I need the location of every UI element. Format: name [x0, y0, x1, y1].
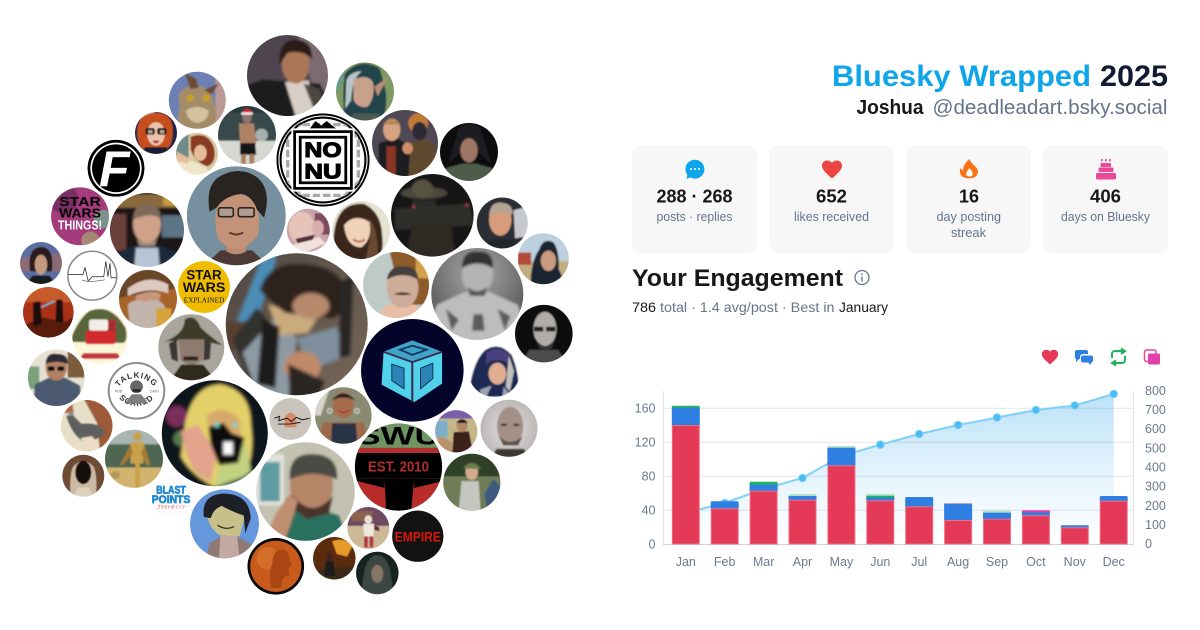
- avatar: golden droid in desert: [105, 430, 163, 488]
- month labels: Feb: [714, 555, 736, 569]
- user name and handle: @deadleadart.bsky.social: [932, 97, 1168, 119]
- month labels: Jun: [870, 555, 890, 569]
- right axis labels: 300: [1145, 480, 1166, 494]
- avatar: Talking Scared podcast logo: [108, 362, 166, 420]
- month labels: Nov: [1064, 555, 1087, 569]
- avatar: feathered creature: [168, 72, 226, 129]
- icon: birthday cake: [1096, 159, 1116, 180]
- avatar: glowing blue holocron cube: [361, 319, 464, 422]
- card: day posting streak: [906, 145, 1031, 253]
- stat label: days on Bluesky: [1061, 210, 1151, 224]
- avatar: NONO geometric logo: NO: [304, 138, 342, 162]
- avatar: man with sunglasses: [28, 349, 85, 406]
- stacked bars: [672, 406, 1128, 544]
- avatar: SWU logo with red helmet: [346, 415, 451, 522]
- avatar: Star Wars Explained logo: STAR: [186, 267, 222, 283]
- avatar: bearded wizard with mug: [119, 270, 177, 328]
- left axis labels: 80: [642, 470, 656, 484]
- right axis labels: [1145, 384, 1166, 551]
- stat label: day posting: [936, 210, 1001, 224]
- avatar: bald man with glasses in black and white: [515, 304, 573, 362]
- avatar: Star Wars Things logo: STAR: [59, 194, 101, 209]
- avatar: copper penny: [247, 538, 304, 595]
- stat label: likes received: [794, 210, 869, 224]
- avatar: Star Wars Things logo: WARS: [59, 205, 101, 220]
- avatar: Star Wars Explained logo: [178, 261, 230, 313]
- right axis labels: 600: [1145, 422, 1166, 436]
- avatar: cartoon man with glasses: [187, 166, 286, 275]
- month labels: Dec: [1103, 555, 1125, 569]
- avatar: hooded dark figure: [352, 547, 403, 599]
- icon: heart: [822, 160, 842, 178]
- avatar: man in bar with mustache: [363, 252, 429, 318]
- avatar: man at colorful fair: [431, 406, 482, 457]
- month labels: Apr: [793, 555, 812, 569]
- avatar: red lava battle scene: [23, 287, 74, 338]
- icon: speech bubble: [685, 160, 704, 179]
- avatar: hooded figure in desert: [518, 233, 569, 284]
- engagement summary line: January: [839, 299, 888, 315]
- avatar: large mirror selfie in denim jacket: [226, 253, 368, 396]
- avatar: Talking Scared podcast logo: TALKING: [114, 372, 157, 386]
- left axis labels: 160: [635, 402, 656, 416]
- avatar: Star Wars Things logo: [51, 187, 109, 246]
- title: Bluesky Wrapped 2025: 2025: [1100, 60, 1168, 93]
- avatar: red jeep on cream background: [72, 308, 128, 364]
- avatar: SWU logo with red helmet: EST. 2010: [368, 459, 429, 475]
- avatar: Blast Points logo: POINTS: [152, 494, 190, 506]
- right axis labels: 700: [1145, 403, 1166, 417]
- avatar: man in dark jacket: [247, 35, 328, 116]
- avatar: Star Wars Explained logo: WARS: [183, 279, 225, 295]
- avatar: witch painting: [158, 314, 224, 380]
- engagement summary line: 786: [632, 299, 656, 315]
- avatar: smiling woman with brown hair: [332, 201, 390, 259]
- avatar: woman in blue and white headdress: [470, 346, 519, 397]
- cumulative area and line: [686, 390, 1117, 544]
- legend icons: [1042, 348, 1160, 366]
- panel: stat cards: [632, 145, 1168, 253]
- right axis labels: 200: [1145, 499, 1166, 513]
- right axis labels: 100: [1145, 518, 1166, 532]
- avatar: Blast Points logo: BLAST: [156, 484, 186, 496]
- right axis labels: 500: [1145, 442, 1166, 456]
- avatar: illustrated hen: [60, 400, 112, 452]
- card: likes received: [769, 145, 894, 253]
- icon: reposts arrows: [1112, 348, 1125, 366]
- avatar: Talking Scared podcast logo: POD: [115, 390, 123, 394]
- right axis labels: 800: [1145, 384, 1166, 398]
- right axis labels: 400: [1145, 460, 1166, 474]
- stat label second line: streak: [951, 226, 987, 240]
- left axis labels: 0: [649, 538, 656, 552]
- month labels: Jan: [676, 555, 696, 569]
- icon: replies bubbles: [1075, 350, 1093, 365]
- avatar: NONO geometric logo: NU: [304, 160, 342, 184]
- card: posts and replies: [632, 145, 757, 253]
- icon: flame: [960, 159, 978, 178]
- avatar: black and white tattooed man: [431, 248, 524, 340]
- month labels: Mar: [753, 555, 774, 569]
- avatar: monkey with dark mask: [62, 454, 104, 497]
- avatar: boy in cap outdoors: [437, 448, 506, 517]
- user name and handle: Joshua: [856, 97, 924, 119]
- avatar: Empire red logo: EMPIRE: [395, 528, 441, 544]
- avatar: signature with orange arch: [270, 398, 312, 440]
- icon: likes heart: [1042, 350, 1058, 364]
- avatar: SWU logo with red helmet: SWU: [357, 422, 440, 450]
- left axis labels: 40: [642, 504, 656, 518]
- avatar: blurred close-up: [286, 208, 330, 252]
- avatar: shirtless man with santa hat: [218, 106, 276, 164]
- avatar: Talking Scared podcast logo: SCARED: [120, 394, 152, 406]
- avatar: red hair with black glasses: [135, 112, 177, 154]
- avatar: blonde woman with torn monster face: [162, 380, 268, 486]
- avatar: F logo: [88, 140, 144, 197]
- panel: avatar bubble cluster: [20, 35, 573, 595]
- avatar: F logo: F: [99, 141, 131, 197]
- stat label: posts · replies: [656, 210, 732, 224]
- month labels: Aug: [947, 555, 969, 569]
- avatar: bald smiling man in grey: [475, 394, 543, 462]
- month labels: Jul: [911, 555, 927, 569]
- avatar: cosplayer pair at convention: [372, 110, 438, 176]
- avatar: dark-haired man: [20, 242, 62, 284]
- avatar: cartoon man on blue: [190, 489, 259, 565]
- avatar: Blast Points logo: ブラストポインツ: [157, 503, 185, 510]
- avatar: painted redhead: [176, 132, 218, 175]
- month labels: [676, 555, 1125, 569]
- icon: info: [855, 270, 869, 284]
- stat value: 16: [959, 186, 979, 206]
- avatar: Empire red logo: [392, 510, 444, 562]
- avatar: man with backward cap and green tee: [246, 432, 365, 551]
- stat value: 288 · 268: [656, 186, 732, 206]
- right axis labels: 0: [1145, 537, 1152, 551]
- avatar: smiling woman in navy dress: [315, 387, 372, 444]
- avatar: man in suit with bookshelf: [110, 193, 184, 267]
- avatar: Blast Points logo: [150, 476, 192, 518]
- avatar: stormtrooper child costume: [343, 503, 394, 555]
- stat value: 652: [816, 186, 847, 206]
- icon: quotes stacked squares: [1144, 350, 1160, 364]
- chart: monthly engagement bars with cumulative line: [635, 384, 1166, 569]
- title: Bluesky Wrapped 2025: Bluesky Wrapped: [832, 60, 1091, 93]
- engagement summary line: [632, 299, 888, 315]
- engagement summary line: total · 1.4 avg/post · Best in: [660, 299, 834, 315]
- avatar: Star Wars Things logo: THINGS!: [58, 218, 102, 233]
- left axis labels: 120: [635, 436, 656, 450]
- avatar: hand-written signature logo: [66, 250, 118, 302]
- avatar: dark wide-brim hat bounty hunter: [391, 174, 474, 257]
- month labels: Oct: [1026, 555, 1046, 569]
- heading: Your Engagement: Your Engagement: [632, 265, 843, 292]
- avatar: Star Wars Explained logo: EXPLAINED: [184, 296, 225, 305]
- avatar: helmeted officer: [440, 123, 498, 181]
- month labels: Sep: [986, 555, 1008, 569]
- avatar: blond man: [476, 198, 528, 248]
- avatar: NONO geometric logo: [276, 114, 370, 206]
- avatar: Talking Scared podcast logo: CAST: [150, 390, 160, 394]
- avatar: elf with silver hair: [336, 62, 394, 120]
- avatar: figure before fire: [309, 533, 360, 584]
- card: days on Bluesky: [1043, 145, 1168, 253]
- left axis labels: [635, 402, 656, 552]
- month labels: May: [830, 555, 854, 569]
- stat value: 406: [1090, 186, 1121, 206]
